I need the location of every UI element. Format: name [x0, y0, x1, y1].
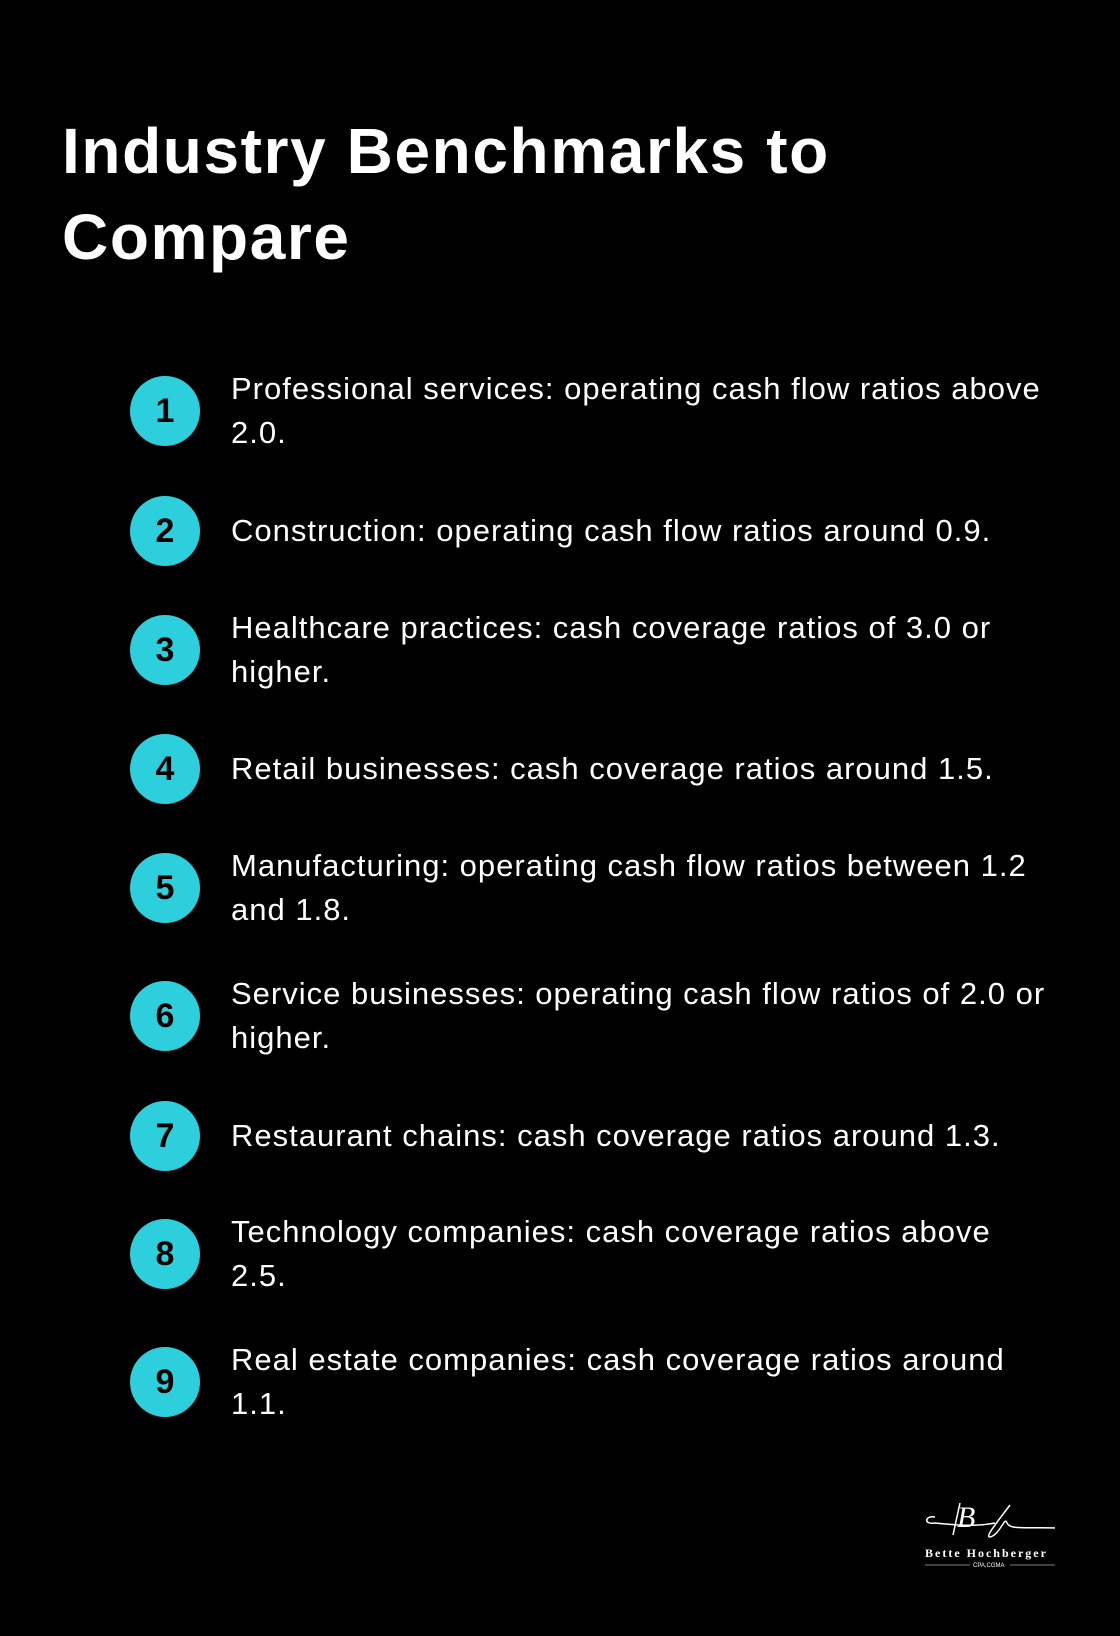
item 5: 5	[156, 868, 174, 906]
logo: B	[957, 1501, 975, 1534]
item 5: Manufacturing: operating cash flow ratios between 1.2	[231, 848, 1027, 883]
item 3: higher.	[231, 654, 331, 689]
item 1: Professional services: operating cash flow ratios above	[231, 371, 1041, 406]
item 6: higher.	[231, 1020, 331, 1055]
item 9	[130, 1342, 1005, 1421]
logo: Bette Hochberger	[925, 1546, 1048, 1560]
item 6: Service businesses: operating cash flow ratios of 2.0 or	[231, 976, 1045, 1011]
item 7: Restaurant chains: cash coverage ratios around 1.3.	[231, 1118, 1001, 1153]
item 5: and 1.8.	[231, 892, 351, 927]
item 1: 2.0.	[231, 415, 287, 450]
logo: CPA,CGMA	[973, 1563, 1005, 1569]
item 8: 2.5.	[231, 1258, 287, 1293]
item 2: Construction: operating cash flow ratios around 0.9.	[231, 513, 991, 548]
item 6: 6	[156, 996, 174, 1034]
item 8: Technology companies: cash coverage ratios above	[231, 1214, 991, 1249]
item 2	[130, 496, 991, 566]
item 8	[130, 1214, 991, 1293]
item 5	[130, 848, 1027, 927]
item 8: 8	[156, 1234, 174, 1272]
item 7: 7	[156, 1116, 174, 1154]
title: Industry Benchmarks to	[62, 115, 830, 187]
item 9: 9	[156, 1362, 174, 1400]
item 4	[130, 734, 994, 804]
item 3: 3	[156, 630, 174, 668]
item 4: Retail businesses: cash coverage ratios around 1.5.	[231, 751, 994, 786]
item 1: 1	[156, 392, 174, 430]
logo	[925, 1501, 1055, 1569]
item 7	[130, 1101, 1001, 1171]
item 9: 1.1.	[231, 1386, 287, 1421]
item 1	[130, 371, 1041, 450]
item 3: Healthcare practices: cash coverage ratios of 3.0 or	[231, 610, 991, 645]
title	[62, 115, 830, 273]
item 9: Real estate companies: cash coverage ratios around	[231, 1342, 1005, 1377]
item 6	[130, 976, 1045, 1055]
title: Compare	[62, 201, 351, 273]
item 2: 2	[156, 512, 174, 550]
item 3	[130, 610, 991, 689]
item 4: 4	[156, 750, 174, 788]
